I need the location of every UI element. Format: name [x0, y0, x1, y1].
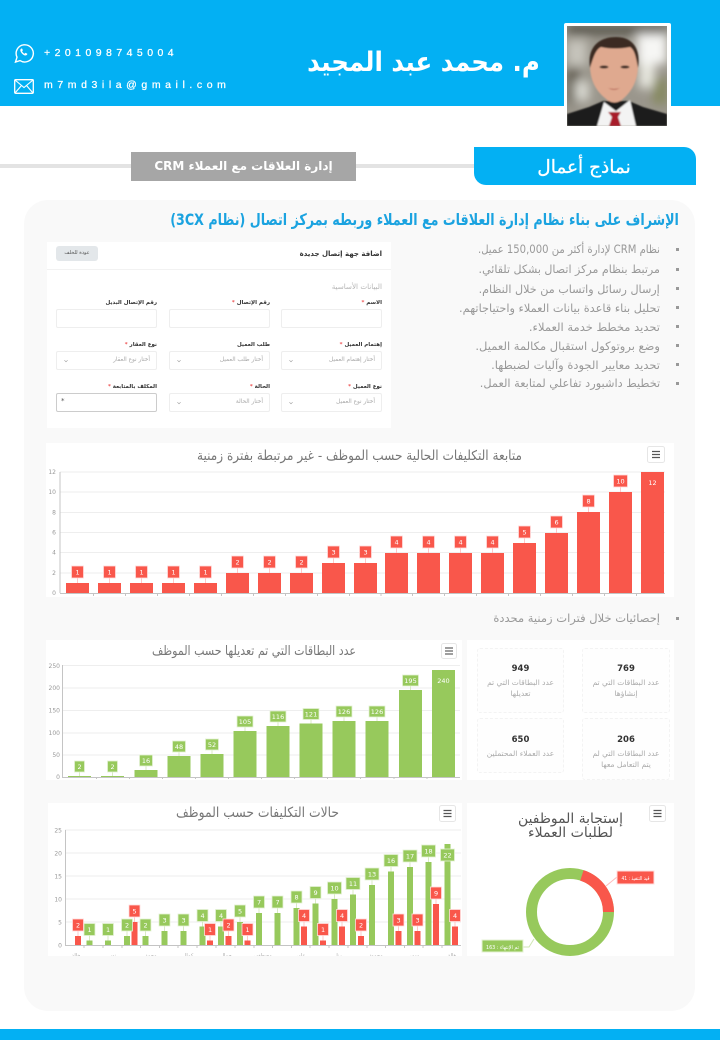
bullet list: تخطيط داشبورد تفاعلي لمتابعة العمل. [480, 376, 660, 390]
y axis labels: 15 [54, 874, 62, 880]
y axis labels: 0 [58, 942, 62, 950]
data labels: 2 [267, 558, 272, 566]
data labels: 6 [554, 518, 559, 526]
row 2 labels and selects [56, 342, 382, 370]
data labels: 1 [203, 568, 208, 576]
row 2 labels and selects: أختار نوع العقار [113, 357, 150, 363]
green data labels: 13 [368, 870, 376, 878]
chart title [518, 811, 623, 841]
data labels: 2 [110, 763, 115, 771]
row 2 labels and selects: طلب العميل [237, 342, 270, 348]
card: created [582, 648, 670, 713]
y axis labels: 200 [49, 685, 60, 692]
green data labels: 9 [313, 889, 318, 897]
data labels: 4 [458, 538, 463, 546]
data labels [74, 675, 450, 776]
red data labels: 5 [132, 908, 137, 916]
red data labels: 3 [396, 916, 401, 924]
back button [56, 246, 98, 261]
red data labels: 4 [453, 912, 457, 920]
card: modified: تعديلها [511, 689, 530, 698]
bullet list: وضع بروتوكول استقبال مكالمة العميل. [475, 339, 660, 353]
red data labels: 9 [434, 890, 438, 898]
gridlines [60, 472, 665, 573]
green data labels: 1 [106, 926, 110, 934]
green data labels: 5 [238, 908, 242, 916]
chart title: إستجابة الموظفين [518, 811, 623, 827]
row 1 labels and inputs [56, 300, 382, 328]
data labels: 3 [331, 548, 336, 556]
icon: whatsapp [14, 44, 34, 64]
green data labels [84, 845, 454, 940]
data labels: 105 [239, 718, 251, 726]
y axis labels: 5 [58, 920, 62, 926]
green data labels: 16 [387, 857, 395, 865]
data labels: 2 [299, 558, 304, 566]
callout: in progress: قيد التنفيذ : 41 [622, 876, 650, 882]
donut ring: completed [532, 874, 608, 950]
project heading: الإشراف على بناء نظام إدارة العلاقات مع العملاء وربطه بمركز اتصال (نظام 3CX) [170, 210, 679, 229]
red data labels: 1 [321, 926, 325, 934]
panel: content background [24, 200, 695, 1011]
menu button [442, 644, 456, 658]
red data labels: 2 [76, 922, 80, 930]
red data labels [72, 887, 460, 940]
data labels: 116 [272, 713, 284, 721]
form subheading: البيانات الأساسية [332, 282, 382, 291]
data labels: 4 [426, 538, 431, 546]
data labels: 4 [394, 538, 399, 546]
row 2 labels and selects: نوع العقار * [125, 342, 157, 348]
x axis names, cut off [72, 953, 457, 959]
form title: اضافة جهة إتصال جديدة [300, 250, 382, 258]
card: untouched: 206 [617, 735, 635, 745]
green data labels: 18 [424, 848, 433, 856]
donut ring: in progress [582, 875, 608, 912]
row 3 labels and selects: نوع العميل * [348, 384, 382, 390]
panel: green bar chart [46, 640, 462, 780]
panel: statistics cards [467, 640, 674, 780]
y axis labels [54, 828, 62, 950]
green data labels: 4 [200, 912, 205, 920]
card: created: 769 [617, 664, 635, 674]
tag: project topic [131, 152, 356, 181]
gridlines [65, 830, 461, 922]
y axis labels [49, 663, 60, 781]
data labels: 52 [208, 741, 216, 749]
data labels: 3 [363, 548, 368, 556]
menu button [648, 446, 664, 462]
row 3 labels and selects: أختار نوع العميل [336, 399, 375, 405]
icon: envelope [14, 79, 34, 94]
green data labels: 3 [181, 916, 186, 924]
red data labels: 2 [226, 922, 231, 930]
card: prospects [477, 718, 564, 773]
red data labels: 4 [302, 912, 306, 920]
card: created: إنشاؤها [614, 689, 638, 698]
y axis labels: 20 [54, 850, 62, 858]
email address: m7md3ila@gmail.com [44, 79, 230, 91]
card: prospects: 650 [512, 735, 529, 745]
data labels: 1 [171, 568, 176, 576]
callout: completed [482, 939, 534, 952]
card: modified: عدد البطاقات التي تم [487, 678, 554, 687]
bullet list: تحديد معايير الجودة وآليات لضبطها. [491, 358, 660, 372]
panel: donut chart [467, 803, 674, 956]
callout: in progress [606, 871, 654, 886]
row 2 labels and selects: أختار طلب العميل [220, 357, 263, 363]
profile photo [564, 23, 671, 128]
panel: contact form [47, 242, 391, 428]
data labels: 1 [75, 568, 80, 576]
bullet: statistics subheading: إحصائيات خلال فترات زمنية محددة [493, 611, 660, 625]
row 3 labels and selects: الحالة * [250, 384, 270, 390]
bars [68, 670, 455, 777]
red data labels: 3 [415, 916, 420, 924]
green data labels: 2 [143, 922, 148, 930]
data labels: 12 [648, 479, 657, 487]
bullet list [459, 242, 679, 390]
green data labels: 11 [349, 880, 357, 888]
data labels: 195 [404, 677, 417, 685]
y axis labels: 2 [52, 570, 56, 577]
green data labels: 17 [406, 852, 414, 860]
x axis [65, 830, 461, 948]
red data labels: 1 [208, 926, 212, 934]
green data labels: 22 [443, 852, 452, 860]
y axis labels: 10 [48, 489, 56, 496]
green bars [86, 844, 450, 945]
row 2 labels and selects: أختار إهتمام العميل [329, 357, 375, 363]
panel: assignment status chart [48, 803, 462, 956]
data labels: 2 [235, 558, 240, 566]
card: untouched: عدد البطاقات التي لم [592, 749, 660, 758]
red data labels: 1 [245, 926, 250, 934]
tag: project topic: إدارة العلاقات مع العملاء CRM [154, 159, 333, 173]
section divider line [0, 164, 474, 168]
chart title: عدد البطاقات التي تم تعديلها حسب الموظف [152, 644, 356, 659]
row 3 labels and selects: أختار الحالة [236, 399, 263, 405]
y axis labels: 10 [54, 896, 62, 904]
data labels: 126 [371, 708, 383, 716]
data labels: 4 [490, 538, 495, 546]
y axis labels: 4 [52, 550, 56, 556]
tag: section title [474, 147, 696, 185]
red data labels: 2 [359, 922, 363, 930]
gridlines [63, 666, 460, 755]
row 3 labels and selects [56, 384, 382, 412]
y axis labels: 100 [49, 730, 60, 737]
bullet list: تحديد مخطط خدمة العملاء. [529, 320, 660, 334]
tag: section title: نماذج أعمال [537, 157, 631, 178]
data labels: 1 [107, 568, 112, 576]
data labels: 5 [522, 528, 527, 536]
card: created: عدد البطاقات التي تم [593, 678, 659, 687]
x axis [60, 472, 665, 596]
row 3 labels and selects: المكلف بالمتابعة * [108, 384, 157, 390]
card: untouched [582, 718, 670, 780]
data labels: 126 [338, 708, 350, 716]
panel: red bar chart [46, 443, 674, 597]
row 2 labels and selects: إهتمام العميل * [340, 342, 382, 348]
green data labels: 4 [219, 912, 223, 920]
card: modified: 949 [512, 664, 529, 674]
card: untouched: يتم التعامل معها [601, 760, 651, 769]
menu button [650, 806, 666, 822]
y axis labels: 0 [52, 590, 56, 597]
data labels [72, 475, 657, 583]
data labels: 121 [305, 710, 317, 718]
bullet list: تحليل بناء قاعدة بيانات العملاء واحتياجاتهم. [459, 301, 660, 315]
y axis labels: 25 [54, 828, 62, 834]
red data labels: 4 [340, 912, 344, 920]
y axis labels [48, 469, 56, 597]
bullet list: إرسال رسائل واتساب من خلال النظام. [479, 282, 660, 296]
row 1 labels and inputs: الاسم * [361, 300, 382, 306]
chart title: حالات التكليفات حسب الموظف [176, 805, 339, 821]
green data labels: 8 [294, 894, 299, 902]
y axis labels: 0 [56, 774, 60, 781]
bullet list: نظام CRM لإدارة أكثر من 150,000 عميل. [478, 242, 660, 256]
row 1 labels and inputs: رقم الإتصال البديل [105, 300, 157, 306]
green data labels: 1 [87, 926, 92, 934]
data labels: 240 [437, 677, 450, 685]
phone number: +201098745004 [44, 47, 178, 59]
row 3 labels and selects: * [61, 397, 64, 405]
data labels: 1 [139, 568, 144, 576]
chart title: متابعة التكليفات الحالية حسب الموظف - غير مرتبطة بفترة زمنية [197, 448, 522, 464]
back button: عودة للخلف [64, 250, 90, 256]
header band [0, 0, 720, 106]
green data labels: 2 [125, 922, 129, 930]
form header divider and title [47, 242, 391, 270]
data labels: 16 [142, 757, 150, 765]
red bars [75, 904, 458, 945]
chart title: لطلبات العملاء [528, 825, 613, 841]
x axis [62, 665, 460, 779]
green data labels: 7 [275, 898, 280, 906]
data labels: 48 [175, 743, 183, 751]
data labels: 10 [616, 478, 625, 486]
y axis labels: 150 [49, 708, 60, 714]
y axis labels: 8 [52, 510, 56, 516]
y axis labels: 250 [49, 663, 60, 670]
green data labels: 7 [257, 898, 261, 906]
green data labels: 10 [330, 884, 339, 892]
y axis labels: 50 [52, 752, 60, 759]
name heading: م. محمد عبد المجيد [307, 47, 540, 78]
card: prospects: عدد العملاء المحتملين [487, 749, 554, 758]
green data labels: 3 [162, 916, 167, 924]
callout: completed: تم الإنتهاء : 163 [486, 945, 519, 951]
bullet list: مرتبط بنظام مركز اتصال بشكل تلقائي. [479, 262, 660, 276]
footer band [0, 1029, 720, 1040]
y axis labels: 6 [52, 530, 56, 536]
data labels: 8 [586, 498, 591, 506]
y axis labels: 12 [48, 469, 56, 476]
menu button [440, 806, 456, 822]
card: modified [477, 648, 564, 713]
bars [66, 472, 664, 593]
data labels: 2 [77, 763, 82, 771]
row 1 labels and inputs: رقم الإتصال * [232, 300, 270, 306]
